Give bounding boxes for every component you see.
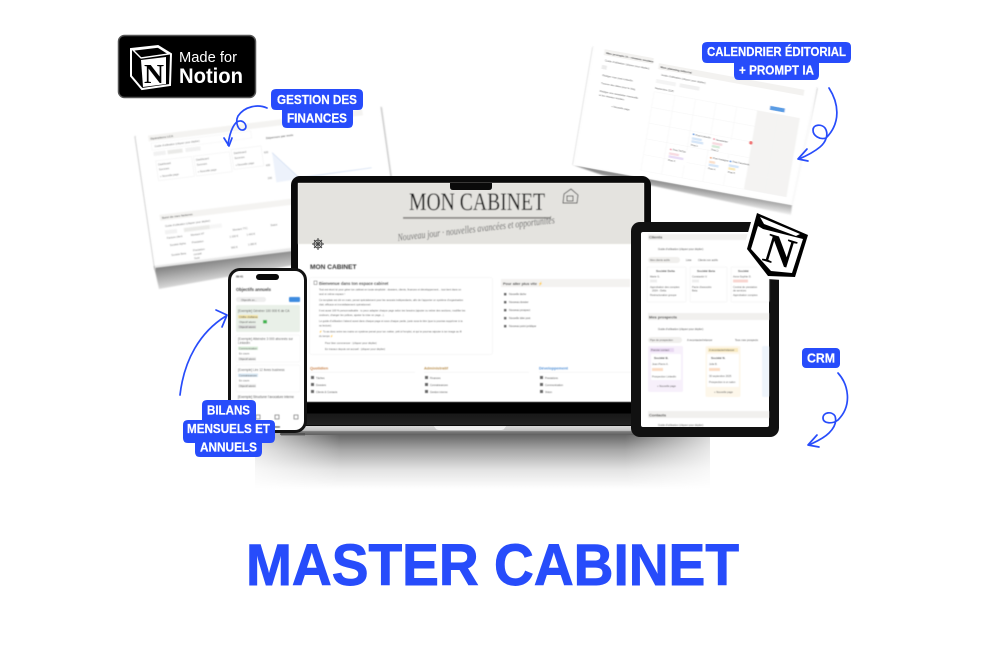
laptop page content: Nouveau prospect [509, 308, 530, 312]
panel: finance sheet: + Nouvelle page [160, 172, 180, 178]
laptop page content: Ce template est clé en main, pensé spécialement pour les avocats indépendants, afin de t'apporter un système d'organisation [319, 298, 464, 302]
panel: editorial calendar sheet: Post LinkedIn [695, 133, 712, 140]
floor shadow under devices [255, 433, 710, 489]
laptop page content: sa lecture). [319, 324, 332, 328]
laptop page content: clair, efficace et immédiatement opérationnel. [319, 302, 371, 306]
panel: finance sheet: Montant HT [191, 232, 205, 237]
tablet section: clients: Approbation des comptes [650, 285, 680, 289]
tablet section: clients: Anne-Sophie D. [733, 274, 752, 278]
laptop page content: Pour aller plus vite ⚡ [503, 281, 543, 286]
tablet section: clients: Approbation comptes [733, 293, 758, 297]
panel: finance sheet: Statut [270, 223, 278, 228]
tablet section: prospects [648, 313, 769, 397]
panel: editorial calendar sheet: Post 4 [708, 166, 716, 172]
callout: bilans mensuels et annuels: MENSUELS ET [187, 422, 270, 436]
panel: editorial calendar sheet: Septembre 2025 [655, 86, 675, 93]
laptop page content: Développement [539, 366, 569, 370]
device: phone: En cours [239, 378, 250, 382]
panel: finance sheet: conseil [193, 251, 202, 256]
panel: finance sheet [135, 107, 399, 289]
tablet section: prospects: Julie B. [709, 362, 718, 366]
laptop page content: Gestion interne [430, 390, 448, 394]
panel: finance sheet: 1 200 € [229, 234, 239, 239]
device: phone: LinkedIn [238, 341, 250, 345]
laptop page content: Connaissances [430, 383, 448, 387]
panel: finance sheet: 400 [266, 163, 271, 168]
laptop page content: couleurs, changer les polices, ajuster la mise en page...). [319, 313, 385, 317]
banner tagline: Nouveau jour · nouvelles avancées et opportunités [396, 215, 555, 244]
icon: Notion cube small: N [144, 59, 165, 89]
panel: finance sheet: 900 € [231, 245, 238, 249]
laptop page content: Nouvelle tâche [509, 292, 527, 296]
device: laptop [280, 176, 656, 435]
panel: finance sheet: Dashboard [233, 150, 247, 155]
panel: finance sheet: + Nouvelle page [235, 161, 255, 167]
callout: bilans mensuels et annuels: ANNUELS [200, 440, 257, 454]
device: tablet [631, 222, 779, 437]
icon: house [563, 189, 578, 203]
laptop page content: Communication [545, 383, 564, 387]
panel: editorial calendar sheet: Newsletter [716, 138, 728, 144]
tablet section: clients: Marie G. [650, 274, 660, 278]
tablet section: clients: Société Delta [656, 269, 675, 273]
panel: finance sheet: Prestation [192, 239, 204, 244]
arrow: bilans [180, 310, 227, 395]
callout: bilans mensuels et annuels: BILANS [207, 404, 250, 418]
tablet section: clients: Beta [692, 288, 698, 292]
callout: calendrier editorial: CALENDRIER ÉDITORIAL [707, 44, 846, 59]
laptop page content: ⚡ Tu as donc entre tes mains un système pensé pour ton métier, prêt à l'emploi, et qui te pourras rajouter à ton image au fil [319, 330, 462, 334]
panel: finance sheet: Société Alpha [170, 241, 187, 247]
tablet section: clients: Mes clients actifs [650, 258, 670, 262]
callout: gestion des finances: GESTION DES [277, 93, 357, 107]
panel: editorial calendar sheet: Post 5 [727, 170, 736, 175]
tablet section: clients: Contrat de prestation [733, 285, 758, 289]
panel: finance sheet: 1 080 € [248, 241, 257, 246]
panel: editorial calendar sheet: Post Facebook [732, 160, 750, 167]
panel: finance sheet: + Nouvelle page [198, 167, 217, 174]
callout: CRM: CRM [807, 352, 835, 366]
laptop page content: Nouvelle idée post [509, 316, 531, 320]
laptop page content: du temps ⚡ [319, 334, 334, 338]
device: phone: 09:41 [236, 274, 244, 278]
panel: editorial calendar sheet: Rédiger mon post LinkedIn [602, 73, 634, 83]
laptop page content: Le guide d'utilisation t'attend aussi dans chaque page et sous chaque partie, juste sous-le titre (que tu pourras supprimer à ta [319, 319, 463, 323]
laptop page content: Vision [545, 390, 553, 394]
panel: editorial calendar sheet: Post 1 [691, 143, 699, 148]
panel: finance sheet: Dashboard [196, 156, 210, 162]
panel: editorial calendar sheet: Guide d'utilisation (cliquez pour déplier) [661, 73, 706, 85]
tablet section: clients: Société Beta [697, 269, 715, 273]
device: phone: Communication [239, 346, 258, 350]
badge: Made for Notion: Made for [179, 49, 237, 66]
panel: finance sheet: 1 440 € [246, 231, 256, 237]
panel: editorial calendar sheet: Post Instagram [713, 156, 730, 163]
device: phone: Objectif atteint [239, 320, 256, 324]
panel: finance sheet: Société Beta [171, 251, 187, 257]
callout: calendrier editorial [702, 42, 851, 80]
tablet section: prospects: Jean-Pierre A. [652, 362, 669, 366]
panel: editorial calendar sheet: et les réseaux sociaux [599, 93, 625, 101]
panel: editorial calendar sheet: Trouver des idées pour le blog [601, 81, 636, 91]
device: phone: Chiffre d'affaires [239, 315, 258, 319]
tablet section: clients [647, 234, 769, 302]
laptop page content: Prestations [545, 376, 559, 380]
laptop page content: Tout est réuni ici pour gérer ton cabinet en toute simplicité : dossiers, clients, finances et développement... tout tient dans un [319, 288, 462, 292]
laptop page content: Tâches [316, 376, 325, 380]
panel: editorial calendar sheet: Rédiger une newsletter mensuelle [599, 89, 639, 100]
tablet section: prospects: Guide d'utilisation (cliquez pour déplier) [658, 327, 703, 331]
laptop page content: MON CABINET [310, 264, 357, 271]
panel: editorial calendar sheet: Post 2 [711, 147, 719, 153]
panel: finance sheet: Sommes [159, 166, 170, 172]
title: MASTER CABINET [246, 533, 739, 598]
tablet section: clients: Société [738, 269, 749, 273]
tablet section: clients: Clients [649, 234, 663, 240]
laptop page content: En travaux depuis cet accueil : (cliquez pour déplier) [325, 347, 385, 351]
panel: finance sheet: Facture client [167, 234, 183, 240]
laptop page content: Clients & Contacts [316, 390, 338, 394]
panel: finance sheet: Dashboard [158, 161, 172, 167]
tablet section: prospects: A recontacter/relancer [709, 348, 735, 352]
panel: finance sheet: Suivi de mes factures [162, 212, 193, 220]
device: phone: Objectifs an... [241, 298, 257, 302]
laptop page content: Finances [430, 376, 441, 380]
tablet section: clients: Guide d'utilisation (cliquez pour déplier) [658, 247, 703, 251]
icon: Notion logo large: N [758, 225, 801, 278]
tablet section: clients: Pacte d'associés [692, 285, 712, 289]
laptop page content: seul et même espace ! [319, 292, 345, 296]
tablet section: prospects: Pipe de prospection [650, 338, 673, 342]
device: phone: Objectif atteint [239, 325, 256, 329]
panel: finance sheet: Guide d'utilisation (cliquez pour déplier) [154, 139, 200, 148]
tablet section: clients: Restructuration groupe [650, 293, 677, 297]
arrow: CRM [808, 373, 847, 447]
laptop page content: Nouveau dossier [509, 300, 529, 304]
camera notch [450, 183, 492, 190]
panel: finance sheet: Prestation [193, 247, 205, 252]
tablet section: clients: 2024 - Delta [652, 288, 667, 292]
device: phone: [Exemple] Structurer l'avocature interne [238, 395, 294, 399]
tablet section: contacts: Contacts [649, 412, 667, 418]
tablet section: prospects: Prospection à un salon [709, 380, 736, 384]
device: phone: [Exemple] Atteindre 3 000 abonnés sur [238, 337, 294, 341]
banner title: MON CABINET [409, 189, 545, 216]
tablet section: prospects: Mes prospects [649, 314, 678, 320]
tablet section: clients: Liste [686, 258, 692, 262]
callout: calendrier editorial: + PROMPT IA [739, 64, 814, 78]
laptop page content: Pour bien commencer : (cliquez pour déplier) [325, 341, 377, 345]
panel: finance sheet: Dépenses par mois [266, 133, 294, 140]
laptop page content: Il est aussi 100 % personnalisable : tu peux adapter chaque page selon tes besoins (ajouter ou retirer des sections, modifier les [319, 308, 466, 312]
device: phone: Objectif atteint [239, 384, 256, 388]
laptop page content: Dossiers [316, 383, 327, 387]
panel: finance sheet: Sommes [234, 155, 246, 160]
tablet section: prospects: Prospection LinkedIn [652, 374, 677, 378]
device: phone: Objectifs annuels [236, 287, 272, 292]
tablet section: clients: Clients non actifs [698, 258, 718, 262]
panel: finance sheet: Suivi [194, 255, 200, 260]
panel: editorial calendar sheet: Post 3 [668, 158, 676, 163]
tablet section: prospects: + Nouvelle page [657, 384, 676, 388]
device: phone: [Exemple] Lire 12 livres business [238, 368, 285, 372]
tablet section: prospects: Société N. [711, 356, 726, 360]
tablet section: clients: Constantin V. [692, 274, 708, 278]
panel: editorial calendar sheet: Guide d'utilisation (cliquez pour déplier) [605, 58, 650, 70]
tablet section: prospects: 30 septembre 2025 [709, 374, 732, 378]
tablet section: prospects: Premier contact [651, 348, 669, 352]
laptop page content [310, 264, 639, 394]
laptop page content: Bienvenue dans ton espace cabinet [319, 281, 389, 286]
laptop page content: Quotidien [310, 366, 329, 370]
arrow: finances [224, 106, 267, 146]
badge: Made for Notion: Notion [179, 64, 243, 88]
device: phone: [Exemple] Générer 100 000 € de CA [238, 309, 290, 313]
laptop page content: Nouveau point juridique [509, 324, 537, 328]
panel: finance sheet: Sommes [197, 162, 208, 167]
laptop screen cover banner [298, 183, 644, 244]
panel: editorial calendar sheet [573, 47, 817, 215]
device: phone: En cours [239, 352, 250, 356]
panel: editorial calendar sheet: Mes prompts IA - réseaux sociaux [606, 51, 654, 64]
tablet section: prospects: Société B. [654, 356, 669, 360]
panel: editorial calendar sheet: Mon planning éditorial [660, 65, 692, 75]
panel: finance sheet: Opérations LCA [150, 134, 174, 141]
arrow: calendrier [798, 88, 837, 161]
tablet section: contacts [648, 411, 769, 427]
callout: gestion des finances: FINANCES [287, 112, 347, 126]
panel: editorial calendar sheet: Post TikTok [672, 148, 687, 154]
icon: Notion logo large [743, 208, 811, 281]
panel: finance sheet: 600 [264, 150, 269, 155]
device: phone: Objectif atteint [239, 357, 256, 361]
device: phone: Connaissances [239, 373, 257, 377]
tablet section: clients: de services [733, 288, 747, 292]
tablet section: prospects: + Nouvelle page [714, 390, 733, 394]
callout: gestion des finances [271, 89, 363, 128]
tablet section: prospects: A recontacter/relancer [687, 338, 713, 342]
panel: finance sheet: Guide d'utilisation (cliquez pour déplier) [165, 219, 211, 228]
laptop page content: Administratif [424, 366, 449, 370]
device: phone [228, 268, 307, 435]
callout: CRM [802, 348, 840, 368]
panel: finance sheet: Montant TTC [232, 226, 248, 232]
panel: finance sheet: 200 [267, 176, 273, 180]
callout: bilans mensuels et annuels [183, 400, 275, 457]
badge: Made for Notion [118, 36, 256, 98]
tablet section: contacts: Guide d'utilisation (cliquez pour déplier) [658, 423, 703, 427]
tablet section: prospects: Tous mes prospects [735, 338, 759, 342]
panel: editorial calendar sheet: + Nouvelle page [611, 104, 631, 112]
icon: snowflake [312, 238, 324, 250]
